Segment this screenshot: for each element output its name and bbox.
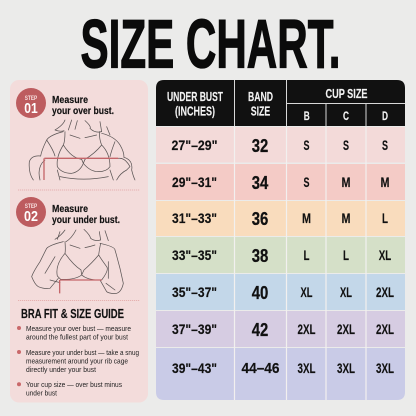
row 32 (172, 135, 388, 156)
step 2 heading: Measure (52, 204, 88, 215)
step 2 badge: STEP (25, 204, 37, 210)
step 1 badge: STEP (25, 96, 37, 102)
panel: measuring guide (10, 80, 148, 402)
bullet 3 (17, 380, 122, 398)
bullet 1: Measure your over bust — measure (26, 324, 131, 333)
row 34 (172, 172, 390, 193)
row 44-46: 3XL (337, 361, 355, 376)
bullet 3: Your cup size — over bust minus (26, 380, 122, 389)
step 1 heading: your over bust. (52, 106, 114, 117)
row 34: M (380, 175, 390, 190)
row 38: 38 (252, 245, 268, 266)
table header: BAND (248, 89, 273, 104)
bullet 1 (17, 324, 131, 342)
guide heading: BRA FIT & SIZE GUIDE (21, 307, 124, 321)
row 34: M (342, 175, 350, 190)
divider (18, 300, 140, 302)
row 42: 2XL (298, 322, 316, 337)
table header (156, 80, 405, 126)
bullet 1: around the fullest part of your bust (26, 332, 129, 342)
row 34: 34 (252, 172, 269, 193)
row 36: 31"–33" (172, 211, 217, 226)
row 42: 2XL (376, 322, 394, 337)
row 34: S (304, 175, 310, 190)
row 32: S (343, 138, 349, 153)
row 40: 2XL (376, 285, 394, 300)
row 42: 2XL (337, 322, 355, 337)
row 32: S (304, 138, 310, 153)
row 32: 32 (252, 135, 268, 156)
row 38: L (304, 248, 310, 263)
row 36: M (342, 211, 350, 226)
row 40 (172, 282, 394, 303)
row 44-46 (172, 360, 394, 377)
row 36: M (302, 211, 311, 226)
size table (156, 80, 405, 400)
row 40: 40 (252, 282, 268, 303)
row 44-46: 3XL (376, 361, 394, 376)
guide list (17, 324, 139, 398)
row 36: L (382, 211, 388, 226)
bullet 2: directly under your bust (26, 365, 97, 374)
bullet 2: Measure your under bust — take a snug (26, 348, 139, 357)
row 32: 27"–29" (172, 138, 218, 153)
row 32: S (382, 138, 388, 153)
bullet 2 (17, 348, 139, 374)
row backgrounds (156, 127, 405, 400)
divider (18, 189, 140, 191)
row 40: XL (300, 285, 312, 300)
illustration: measuring under bust (32, 229, 123, 293)
row 42: 42 (252, 319, 268, 340)
row 36 (172, 208, 388, 229)
row 38: 33"–35" (172, 248, 217, 263)
table header: UNDER BUST (167, 89, 223, 104)
row 40: XL (340, 285, 352, 300)
row 34: 29"–31" (172, 175, 217, 190)
step 2 heading: your under bust. (52, 215, 120, 226)
row 36: 36 (252, 208, 268, 229)
row 42 (172, 319, 394, 340)
table header: CUP SIZE (326, 86, 368, 101)
row 44-46: 39"–43" (172, 361, 217, 376)
table header: D (382, 109, 388, 123)
illustration: measuring over bust (29, 120, 135, 180)
row 44-46: 3XL (298, 361, 316, 376)
table header: (INCHES) (175, 104, 215, 119)
step 1 heading: Measure (52, 95, 88, 106)
row 38: XL (379, 248, 391, 263)
row 38 (172, 245, 391, 266)
row 42: 37"–39" (172, 322, 217, 337)
table header: B (304, 109, 310, 123)
row 38: L (343, 248, 349, 263)
step 1 badge (16, 88, 46, 118)
table header: SIZE (251, 104, 270, 119)
row 40: 35"–37" (172, 285, 217, 300)
table header: C (343, 109, 349, 123)
step 2 badge: 02 (24, 208, 38, 225)
row 44-46: 44–46 (242, 360, 280, 377)
bullet 2: measurement around your rib cage (26, 356, 128, 366)
step 2 badge (16, 197, 46, 227)
bullet 3: under bust (26, 389, 58, 398)
step 1 badge: 01 (24, 100, 38, 117)
